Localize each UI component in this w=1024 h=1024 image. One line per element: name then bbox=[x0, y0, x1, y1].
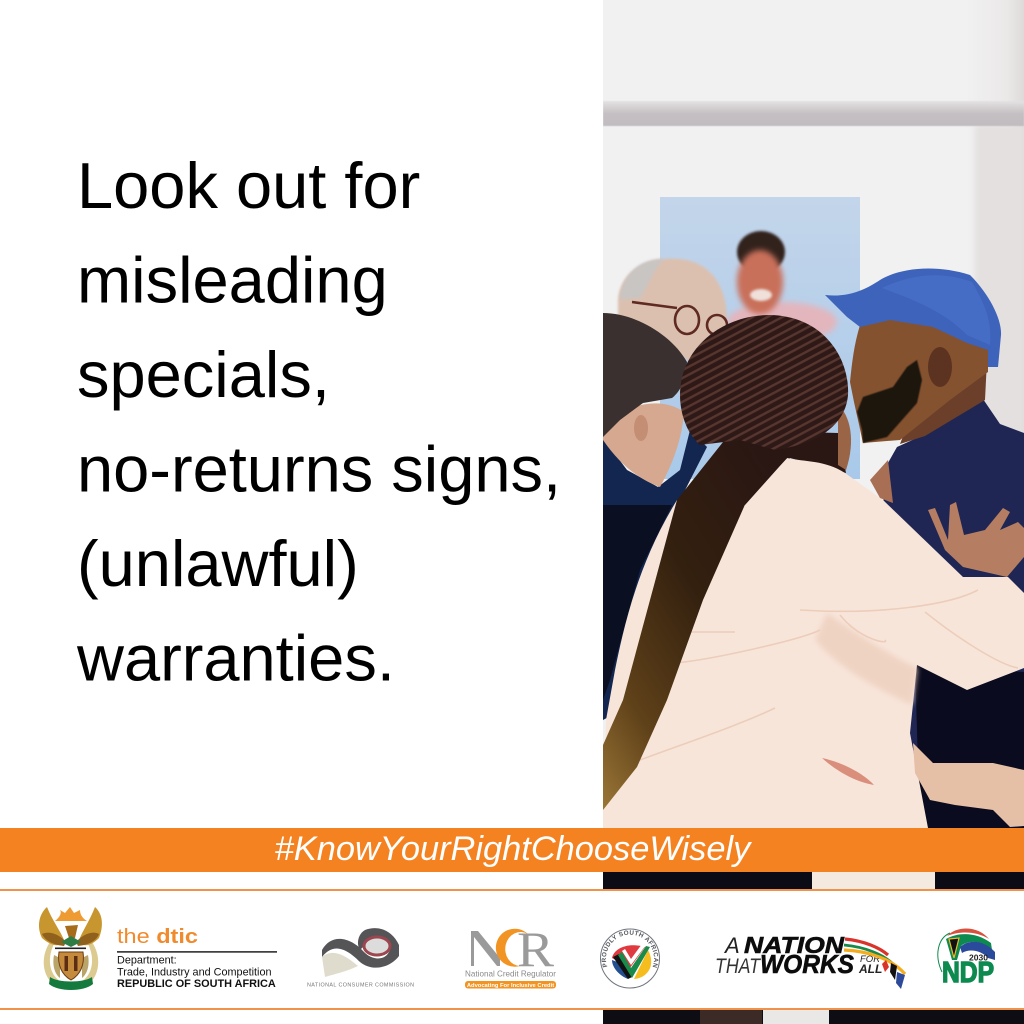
hand on chest bbox=[928, 502, 1024, 577]
photo: people arguing in a shop bbox=[603, 0, 1024, 1024]
wall shaded column bbox=[975, 126, 1007, 426]
red sector bbox=[612, 945, 645, 968]
figures bbox=[64, 956, 78, 971]
ribbon cream bbox=[322, 953, 358, 977]
dark strip under logos bbox=[603, 1010, 1024, 1024]
2030: 2030 bbox=[969, 952, 988, 962]
NDP letters: NDP bbox=[942, 957, 994, 989]
very dark background lower left bbox=[603, 505, 672, 700]
C letter bbox=[496, 929, 528, 967]
cap highlight bbox=[882, 275, 990, 345]
main headline: specials, bbox=[77, 338, 330, 411]
bird head bbox=[65, 925, 78, 938]
spear line bbox=[55, 948, 86, 949]
hashtag text: #KnowYourRightChooseWisely bbox=[275, 830, 752, 868]
green diamond bbox=[61, 936, 81, 947]
regulator name: National Credit Regulator bbox=[465, 970, 556, 978]
flag swoosh bbox=[845, 939, 888, 955]
wall background bbox=[603, 0, 1024, 744]
logo: NDP 2030 bbox=[938, 928, 995, 989]
blue arc bbox=[960, 942, 995, 960]
N letter bbox=[471, 931, 500, 966]
main headline: warranties. bbox=[76, 622, 395, 694]
twisted bun bbox=[680, 315, 848, 450]
woman on right: braids behind neck bbox=[740, 432, 846, 505]
ribbon grey bbox=[322, 928, 399, 968]
man neck bbox=[900, 373, 986, 444]
woman on left: hair bbox=[603, 313, 687, 437]
the dtic wordmark: the dtic bbox=[117, 925, 198, 948]
lower dark shadow bbox=[915, 665, 1024, 830]
R letter: R bbox=[517, 921, 555, 977]
circular wordmark: PROUDLY SOUTH AFRICAN bbox=[602, 930, 658, 968]
thin ring bbox=[938, 933, 950, 972]
blue and black sector bbox=[612, 960, 628, 979]
second hand at collar bbox=[870, 460, 893, 503]
logo strip bbox=[0, 889, 1024, 1010]
department text: REPUBLIC OF SOUTH AFRICA bbox=[117, 978, 276, 990]
ribbon maroon ring bbox=[364, 937, 390, 955]
lighter patch under logos bbox=[763, 1010, 829, 1024]
logo: a nation that works for all: ALL bbox=[858, 962, 882, 976]
wings bbox=[39, 907, 65, 945]
outer laurel ring bbox=[44, 942, 98, 988]
jacket crease lines bbox=[640, 590, 1018, 760]
logo: a nation that works for all: NATION bbox=[744, 932, 844, 958]
poster figure hair bbox=[737, 231, 785, 273]
logo: a nation that works for all: WORKS bbox=[760, 949, 855, 979]
man ear bbox=[928, 347, 952, 387]
department text: Department: bbox=[117, 954, 177, 966]
hand lower right bbox=[913, 743, 1024, 827]
yellow sector bbox=[634, 950, 651, 979]
shield bbox=[59, 952, 83, 980]
orange hashtag banner bbox=[0, 828, 1024, 872]
sun bbox=[55, 907, 87, 921]
brown patch under logos bbox=[700, 1010, 762, 1024]
logo: the dtic department bbox=[117, 925, 277, 990]
green field bbox=[946, 934, 992, 960]
dark strip behind logo band: black bbox=[603, 872, 1024, 889]
THAT WORKS: THAT bbox=[715, 955, 762, 978]
logo: national credit regulator: Advocating For Inclusive Credit bbox=[467, 983, 554, 989]
FOR ALL: FOR bbox=[860, 954, 880, 965]
glasses bbox=[632, 302, 727, 335]
jacket below banner bbox=[812, 872, 935, 889]
blue poster bbox=[660, 197, 860, 479]
wall ledge band bbox=[603, 101, 1024, 126]
poster figure face bbox=[737, 250, 783, 314]
man beard bbox=[857, 360, 922, 443]
main headline: no-returns signs, bbox=[77, 432, 561, 506]
jacket pocket slit bbox=[822, 758, 874, 785]
main headline: Look out for bbox=[77, 149, 420, 222]
man face bbox=[850, 312, 988, 443]
lower wing shading bbox=[42, 933, 99, 946]
poster figure shoulders bbox=[727, 302, 837, 342]
older man with glasses bbox=[618, 259, 727, 365]
woman on left: navy jacket bbox=[603, 430, 707, 720]
logo: national credit regulator bbox=[465, 921, 556, 989]
wheat bbox=[53, 955, 89, 978]
long braid bbox=[603, 437, 793, 810]
jacket underarm shadow bbox=[815, 613, 917, 705]
logo: a nation that works for all bbox=[715, 932, 905, 989]
woman on left: ear bbox=[634, 415, 648, 441]
main headline: (unlawful) bbox=[77, 527, 359, 600]
man navy shirt and dark torso bbox=[884, 400, 1024, 754]
man blue cap bbox=[825, 269, 1001, 367]
A NATION: A bbox=[723, 933, 740, 958]
orange tagline pill bbox=[465, 981, 556, 988]
main headline: misleading bbox=[77, 244, 388, 316]
commission text: NATIONAL CONSUMER COMMISSION bbox=[307, 983, 414, 989]
logo: national consumer commission bbox=[307, 928, 414, 989]
black triangle bbox=[949, 938, 959, 958]
department text: Trade, Industry and Competition bbox=[117, 966, 272, 978]
poster figure smile bbox=[750, 289, 772, 301]
woman on left: face and neck bbox=[603, 403, 684, 487]
red arc bbox=[947, 928, 989, 939]
woman on right: cheek bbox=[838, 405, 851, 470]
logo: coat of arms bbox=[39, 907, 102, 990]
woman pink jacket bbox=[603, 458, 1024, 828]
grey hair bbox=[620, 259, 664, 300]
green motto ribbon bbox=[49, 977, 93, 990]
logo: proudly south african bbox=[600, 928, 660, 988]
green tick bbox=[618, 946, 650, 978]
